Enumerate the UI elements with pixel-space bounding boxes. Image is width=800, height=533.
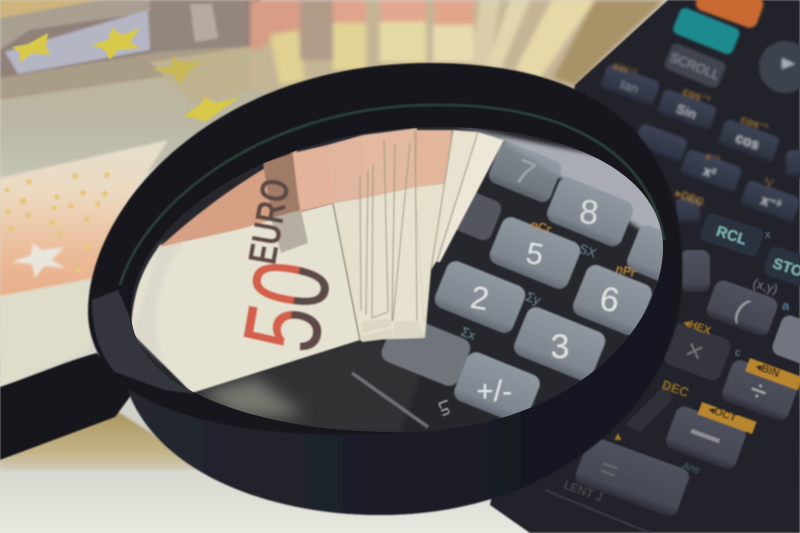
key plus minus: +/- <box>476 375 512 408</box>
parenthesis key <box>704 278 780 338</box>
cream lower sheets <box>333 198 363 342</box>
equals key <box>573 435 692 519</box>
key 5: 5 <box>524 237 546 272</box>
upper orange legends: sin⁻¹ <box>611 60 639 80</box>
divide key: ÷ <box>745 373 772 410</box>
calculator keys in lens: SX <box>577 241 599 261</box>
orange legends: ◂BIN <box>753 360 781 380</box>
key labels in lens: Σy <box>524 289 543 308</box>
calculator keys in lens: nPr <box>614 261 637 280</box>
50 numeral: 50 <box>219 252 354 360</box>
orange legends: ◂OCT <box>706 403 738 425</box>
key 4 <box>456 192 502 241</box>
white star on note <box>12 243 65 278</box>
multiply key: × <box>680 333 708 370</box>
calculator keys in lens <box>350 142 663 429</box>
key 9 <box>626 226 663 282</box>
calculator buttons outside lens, upper blurred area: cos <box>734 129 762 153</box>
multiply key <box>662 321 733 383</box>
calculator buttons outside lens, upper blurred area: x² <box>701 162 719 182</box>
key 2: 2 <box>468 279 492 317</box>
top row keys: tan <box>618 76 641 97</box>
EURO label: EURO <box>241 175 299 268</box>
small labels: c <box>735 347 741 359</box>
shift-style key: SCROLL <box>668 49 722 83</box>
calculator buttons outside lens, lower sharp area <box>545 212 800 533</box>
key 0 dot <box>380 323 471 387</box>
ENT legend: LENT J <box>562 478 604 504</box>
key 7: 7 <box>509 152 541 194</box>
key 7 <box>488 142 562 203</box>
notes at top centre <box>250 0 665 90</box>
key 5 <box>489 216 581 290</box>
calculator body <box>490 0 800 533</box>
key 6 <box>572 264 653 336</box>
small labels: Ans <box>681 460 701 477</box>
calculator buttons outside lens, upper blurred area: Sin <box>674 101 699 122</box>
rim front wall <box>127 250 682 515</box>
orange legends: ▲ <box>612 429 624 443</box>
STO key <box>763 245 800 292</box>
key plus minus <box>453 351 541 418</box>
teal key <box>671 6 741 56</box>
stars on the note <box>12 28 240 122</box>
small labels <box>681 229 790 477</box>
euro banknote <box>131 150 360 393</box>
pink tops <box>293 145 335 212</box>
rim inner wall highlight <box>92 290 195 394</box>
equals key: = <box>595 451 623 488</box>
banknotes in the background <box>0 0 290 387</box>
shift-style key <box>663 42 727 89</box>
upper orange legends: cos⁻¹ <box>739 114 770 135</box>
dots on the note <box>4 172 110 273</box>
lower-left key <box>625 382 672 432</box>
RCL key: RCL <box>714 223 749 249</box>
arrow pad <box>759 41 800 93</box>
lens background <box>120 120 670 440</box>
bright note <box>0 140 168 296</box>
orange legends: DEC <box>660 377 691 400</box>
small labels: (x,y) <box>751 275 780 296</box>
calculator buttons outside lens, upper blurred area <box>599 0 800 225</box>
key 6: 6 <box>597 280 622 320</box>
rim bevel <box>120 105 664 285</box>
small labels: x <box>765 229 771 241</box>
upper orange legends: ▸DEG <box>673 187 706 209</box>
key 3: 3 <box>551 328 569 366</box>
calculator keys in lens: nCr <box>529 217 553 236</box>
upper orange legends <box>611 60 775 209</box>
calculator buttons outside lens, upper blurred area: x⁻³ <box>759 191 783 213</box>
orange legends: ◂HEX <box>681 316 713 338</box>
orange key <box>694 0 766 30</box>
key 8: 8 <box>577 193 601 233</box>
shadow under bills <box>198 342 418 431</box>
upper orange legends: cos⁻¹ <box>681 86 712 107</box>
key 8 <box>546 178 634 247</box>
top row keys <box>599 63 661 108</box>
fanned sheet edges <box>431 130 478 270</box>
parenthesis key: ( <box>730 293 754 324</box>
magnifier handle <box>0 353 135 460</box>
magnifier rim <box>88 63 682 515</box>
upper orange legends: ³√ <box>762 176 775 190</box>
key 2 <box>432 258 528 336</box>
divide key <box>720 358 800 423</box>
upper orange legends: x⁻¹ <box>704 150 722 166</box>
fan of notes <box>293 128 504 342</box>
orange legends <box>612 316 800 443</box>
small labels: a <box>782 298 790 313</box>
calculator keys in lens: Ln <box>435 398 456 418</box>
RCL key <box>699 212 765 258</box>
calculator keys in lens: Σx <box>459 324 478 343</box>
lens contents <box>131 127 663 432</box>
key 3 <box>511 304 608 384</box>
minus key <box>663 404 748 472</box>
